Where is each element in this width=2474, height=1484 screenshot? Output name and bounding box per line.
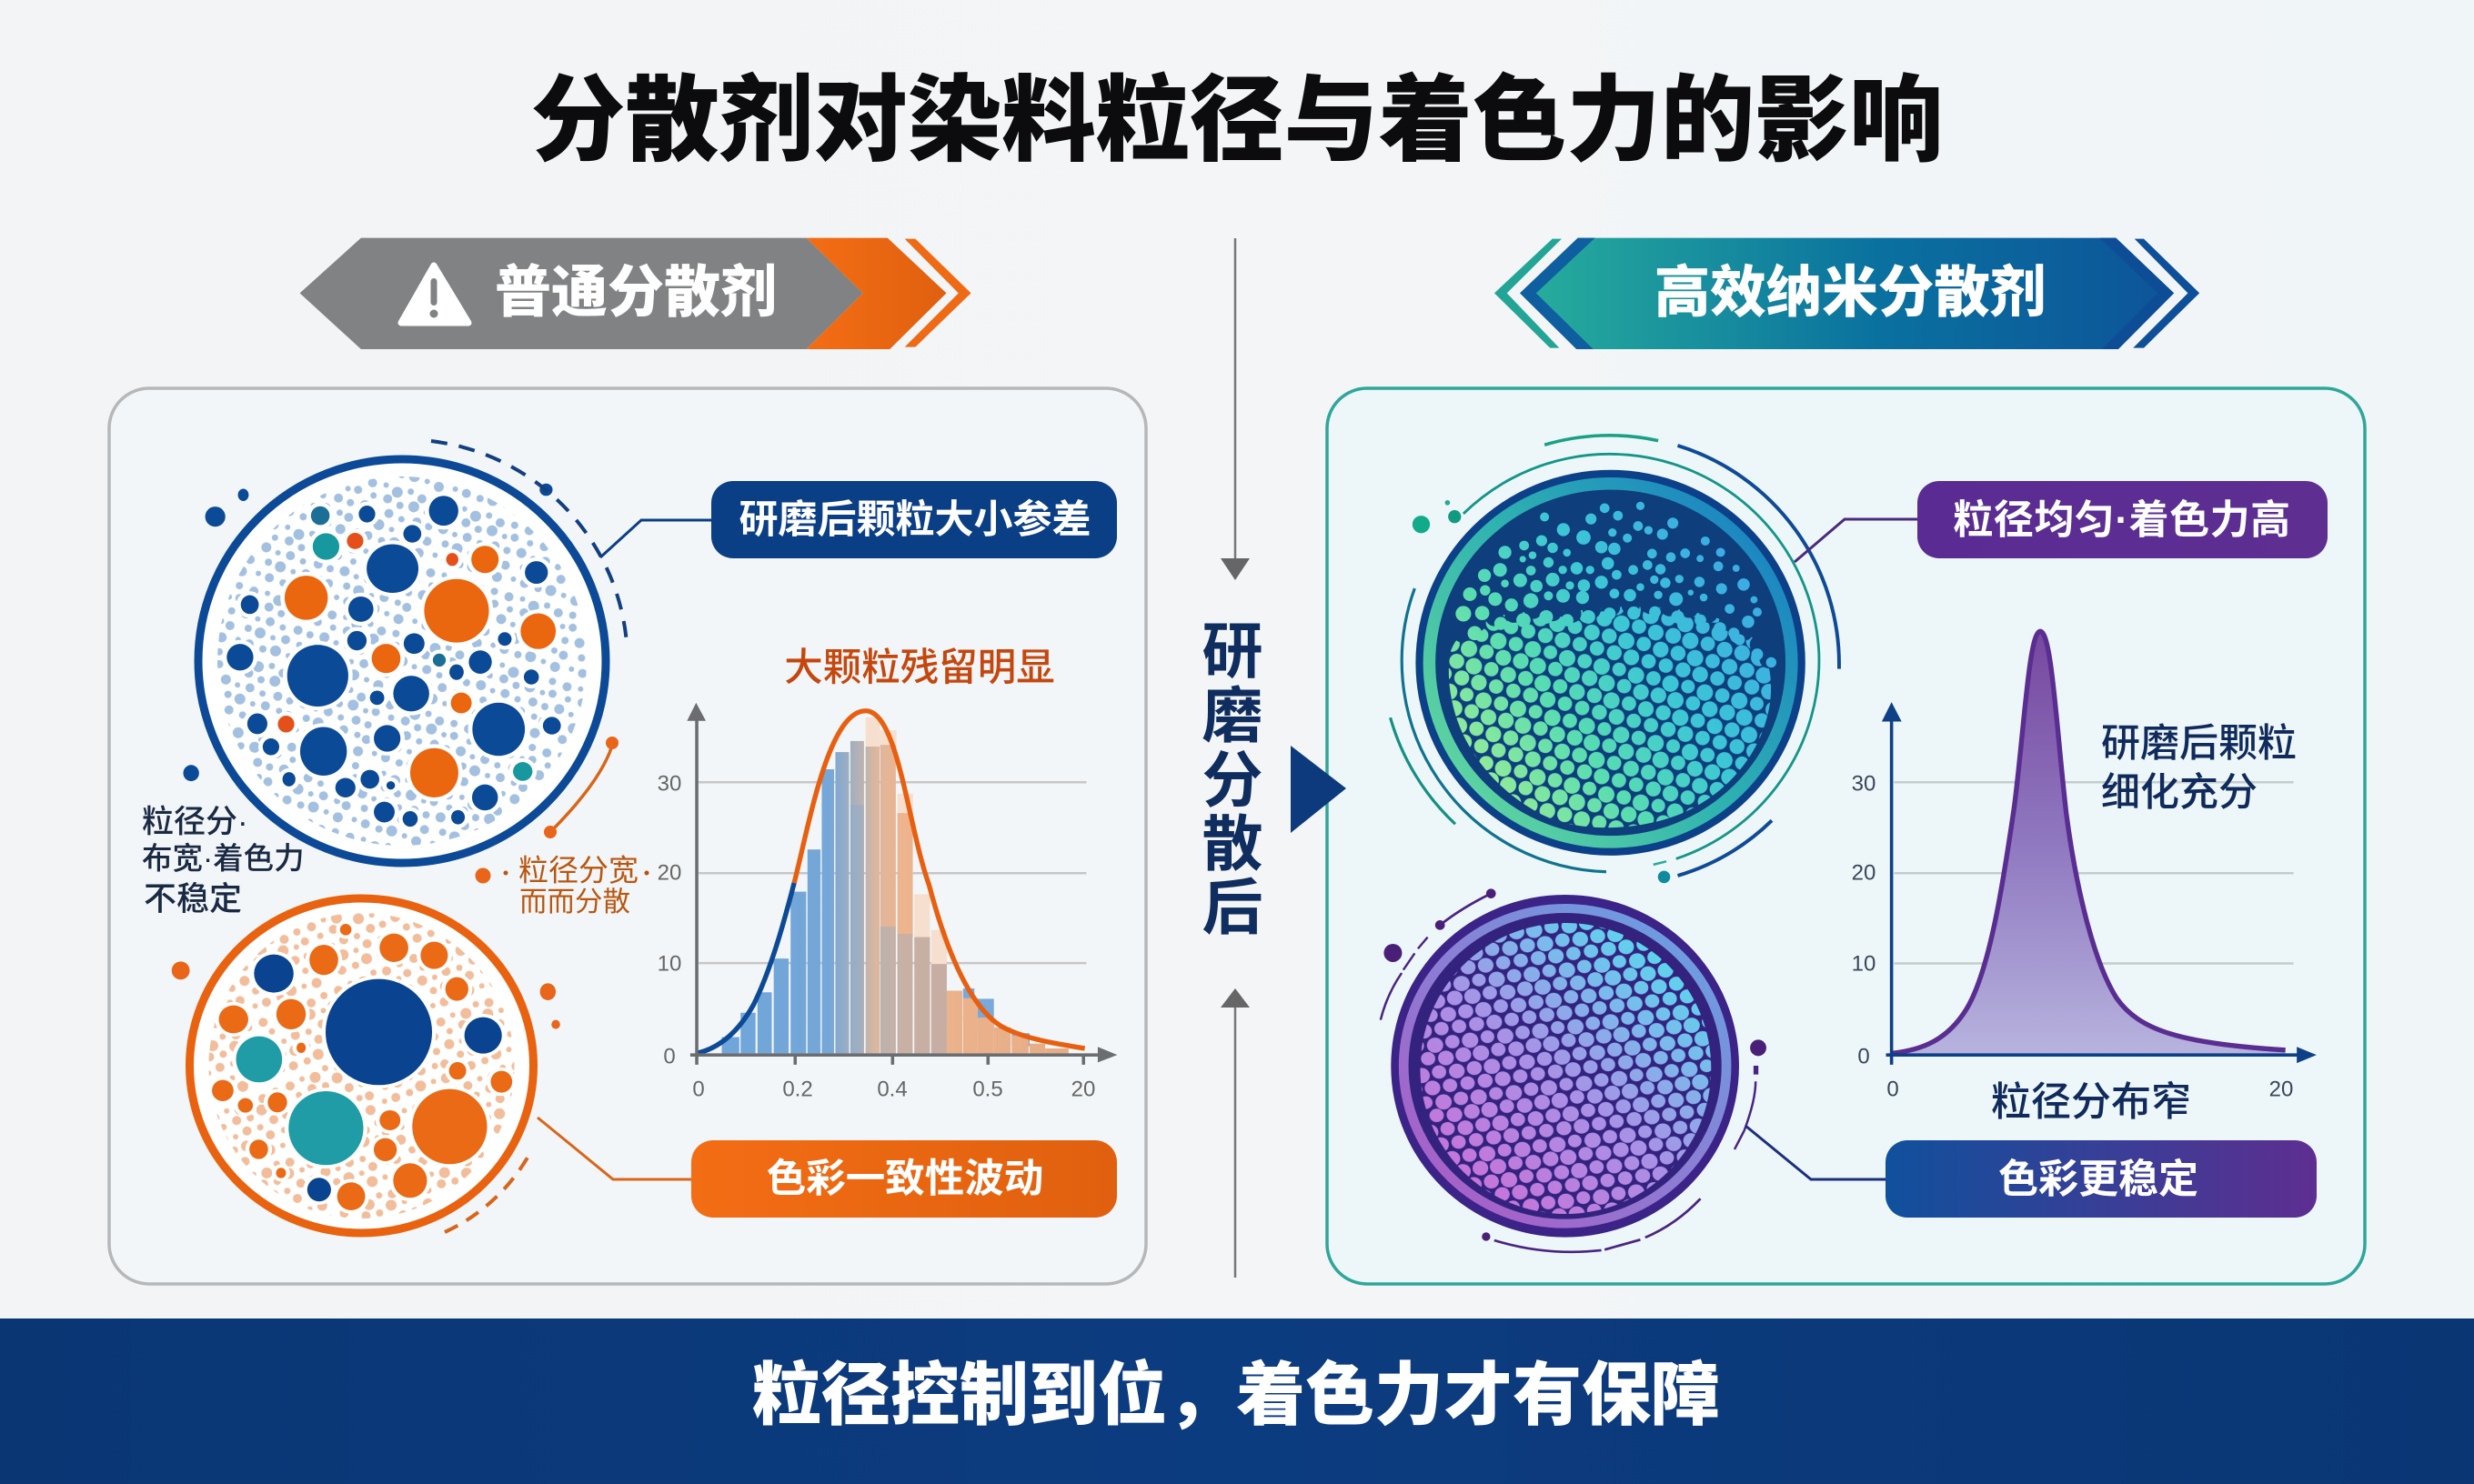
center label: after grinding: 磨 [1202,682,1262,751]
center label: after grinding: 散 [1202,811,1262,878]
green circle orbit arcs and dots [1391,436,1839,883]
connector: top-left pill [600,520,711,557]
chart: narrow particle size distribution: 30 [1852,771,1876,797]
pill: uniform size high strength: 粒径均匀·着色力高 [1953,498,2291,542]
center label: after grinding: 研 [1202,618,1262,686]
chart: wide particle size histogram: 30 [658,771,681,797]
chart: wide particle size histogram: 0 [663,1044,676,1069]
chart: wide particle size histogram: 0.5 [972,1077,1003,1102]
footer text: 粒径控制到位，着色力才有保障 [752,1357,1720,1435]
chart: narrow particle size distribution: 0 [1886,1077,1899,1102]
particle circle: wide distribution blue [198,459,606,863]
chart: wide particle size histogram: 0 [692,1077,705,1102]
chart: narrow particle size distribution: 20 [1852,860,1876,886]
panel: standard dispersant [109,388,1146,1284]
orange circle decorative dots and dashed arc [172,961,560,1232]
particle circle: orange [189,898,533,1233]
text: particles fully refined: 细化充分 [2101,771,2258,815]
text: particles fully refined [2101,722,2297,815]
pill: color more stable [1886,1140,2317,1218]
chart: wide particle size histogram: 20 [1071,1077,1095,1102]
blue circle decorative dots and dashed arc [183,441,627,781]
center divider top arrow [1221,238,1250,580]
text: wide distribution note: 粒径分· [142,804,248,840]
text: wide distribution note [142,804,305,917]
chart: wide particle size histogram [644,703,1117,1102]
pill: color more stable: 色彩更稳定 [1998,1157,2198,1202]
text: wide distribution note: 不稳定 [144,880,242,917]
particle circle: uniform green-blue [1413,458,1819,864]
chart: wide particle size histogram: 20 [658,860,681,886]
chart: wide particle size histogram: 0.2 [782,1077,813,1102]
chart: wide particle size histogram: 0.4 [877,1077,908,1102]
footer band [0,1319,2474,1484]
orange accent curve [544,737,618,838]
connector: lower-right pill [1745,1126,1886,1179]
text: particles fully refined: 研磨后颗粒 [2101,722,2297,766]
purple circle orbit arcs and dots [1381,888,1766,1252]
particle circle: uniform purple [1391,895,1754,1238]
text: wide distribution note: 布宽·着色力 [142,842,305,877]
pill: uneven particle size: 研磨后颗粒大小参差 [739,498,1091,542]
banner: standard dispersant: 普通分散剂 [495,262,777,324]
chart heading: large particles remain: 大颗粒残留明显 [784,647,1055,689]
panel: nano dispersant [1327,388,2365,1284]
center divider bottom arrow [1221,988,1250,1278]
chart: narrow particle size distribution [1852,631,2317,1102]
chart: wide particle size histogram: 10 [658,951,681,977]
text: orange note: 粒径分宽 [518,853,639,887]
banner: standard dispersant [300,238,971,349]
center label: after grinding: 后 [1202,875,1262,942]
title: 分散剂对染料粒径与着色力的影响 [531,67,1943,173]
pill: color consistency fluctuates: 色彩一致性波动 [767,1158,1043,1201]
center label: after grinding: 分 [1202,747,1262,815]
chart: narrow particle size distribution: 20 [2269,1077,2293,1102]
chart: narrow particle size distribution: 0 [1857,1044,1870,1069]
banner: high-efficiency nano dispersant: 高效纳米分散剂 [1654,262,2046,324]
connector: lower-left pill [538,1118,691,1179]
text: narrow distribution: 粒径分布窄 [1991,1080,2191,1124]
banner: high-efficiency nano dispersant [1494,238,2199,349]
center label: after grinding [1202,618,1262,942]
connector: top-right pill [1795,519,1917,562]
pill: uniform size high strength [1917,481,2328,558]
center triangle arrow [1291,746,1346,833]
pill: color consistency fluctuates [691,1140,1117,1218]
chart: narrow particle size distribution: 10 [1852,951,1876,977]
text: orange note [475,853,639,917]
pill: uneven particle size [711,481,1117,558]
text: orange note: 而而分散 [519,887,630,917]
